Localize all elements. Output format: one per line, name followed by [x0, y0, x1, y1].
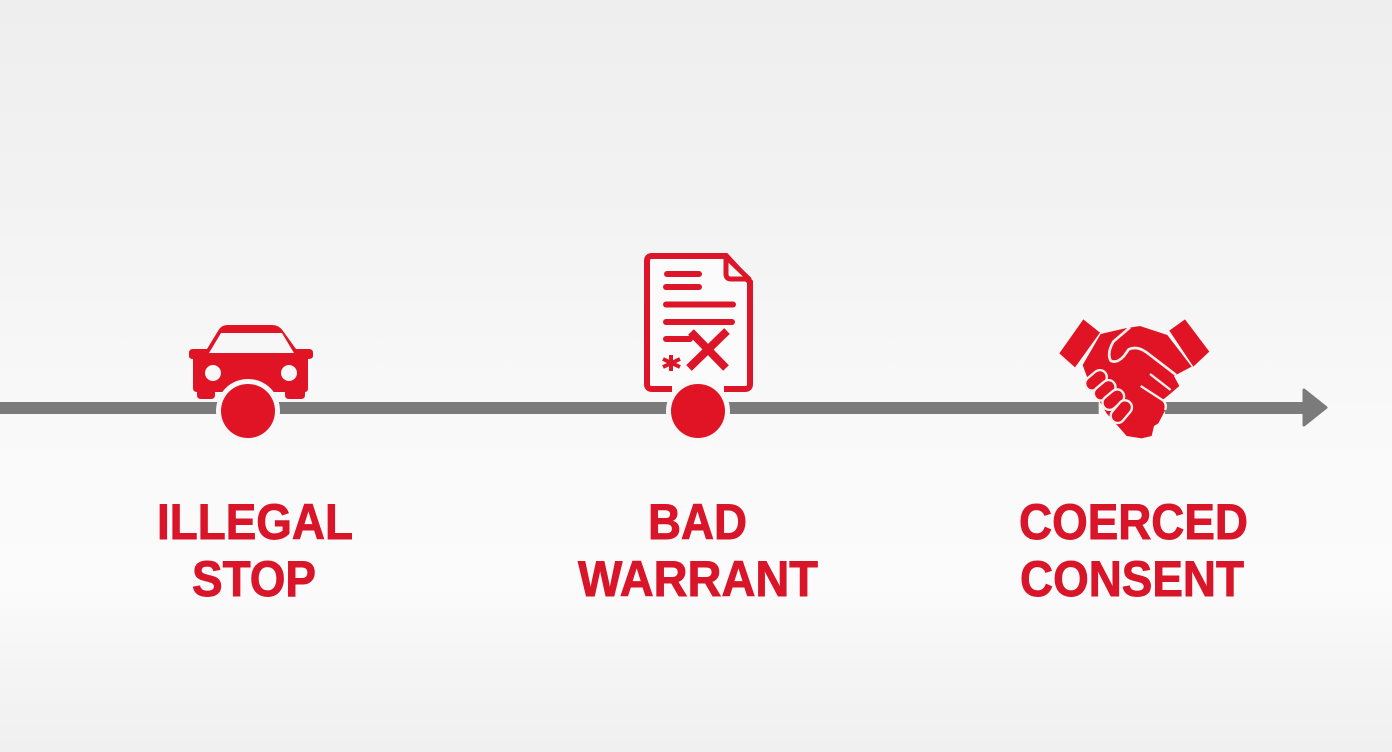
label: illegal stop: ILLEGAL: [157, 494, 353, 550]
label: bad warrant: [578, 494, 818, 607]
label: illegal stop: STOP: [192, 551, 316, 607]
label: bad warrant: WARRANT: [578, 551, 818, 607]
icon: warrant document: [647, 256, 750, 389]
icon: car: [189, 325, 313, 399]
icon: handshake: [1059, 319, 1209, 438]
timeline marker: warrant: [666, 379, 730, 443]
label: illegal stop: [157, 494, 353, 607]
label: coerced consent: [1019, 494, 1248, 607]
timeline marker: car: [216, 379, 280, 443]
label: coerced consent: CONSENT: [1020, 551, 1244, 607]
label: bad warrant: BAD: [648, 494, 747, 550]
timeline arrow: [0, 390, 1326, 425]
label: coerced consent: COERCED: [1019, 494, 1248, 550]
